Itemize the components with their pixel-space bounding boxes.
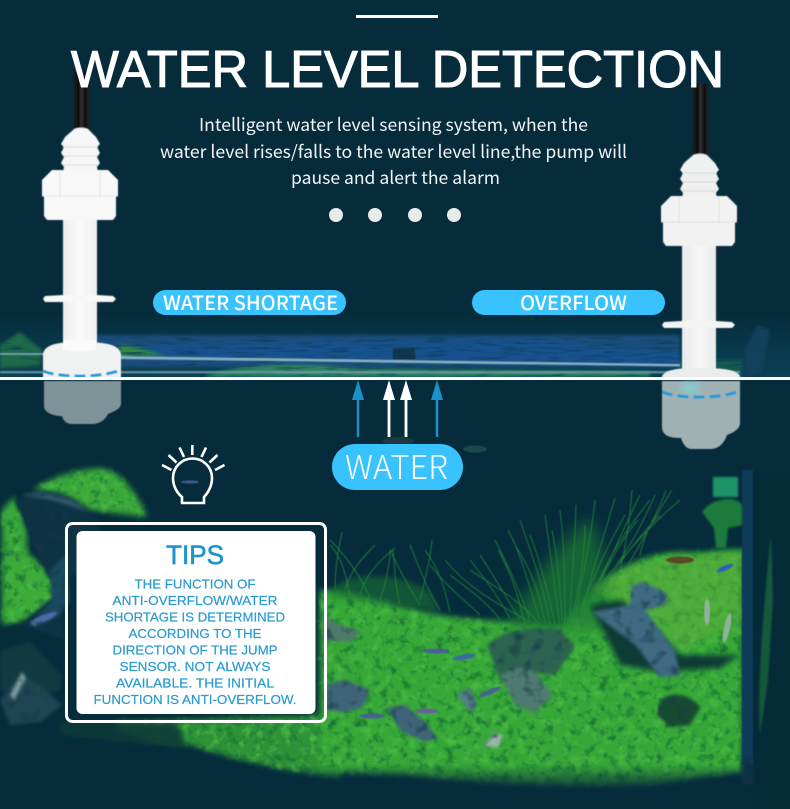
right sensor: overflow: [661, 84, 740, 449]
tips body: ANTI-OVERFLOW/WATER: [112, 593, 278, 608]
inner card: [76, 531, 316, 714]
tips panel: [66, 524, 326, 722]
mound highlight: [590, 552, 742, 650]
rocks: [323, 582, 700, 748]
thread shading: [682, 173, 717, 191]
description: pause and alert the alarm: [291, 165, 500, 190]
tips body: [94, 576, 296, 707]
arrows: rising water: [352, 380, 443, 437]
tips body: FUNCTION IS ANTI-OVERFLOW.: [94, 692, 296, 707]
submerged teal glow: [680, 382, 700, 394]
background plant with green tag: [702, 477, 742, 548]
tips body: THE FUNCTION OF: [134, 576, 256, 592]
outer frame: [66, 524, 326, 722]
aquarium water surface band: [0, 315, 790, 378]
water level line: [0, 377, 790, 380]
tips body: DIRECTION OF THE JUMP: [112, 642, 278, 658]
water mark dashes: [662, 391, 740, 397]
threaded neck: [680, 154, 719, 198]
description: water level rises/falls to the water level line,the pump will: [160, 139, 627, 164]
hex nut: [661, 196, 737, 246]
top accent line: [356, 15, 438, 18]
nut facets: [42, 171, 118, 197]
central grass: [330, 490, 680, 625]
float: [43, 342, 121, 378]
stem: [682, 246, 716, 374]
tank post and right side: [742, 470, 790, 809]
stem base over float: [63, 340, 96, 352]
dark shadow under mound: [590, 600, 740, 672]
pagination dots: [329, 208, 461, 222]
dark zone under tips panel: [60, 722, 190, 748]
label: water shortage: WATER SHORTAGE: [163, 287, 338, 316]
stem: [63, 220, 97, 348]
description: Intelligent water level sensing system, when the: [199, 112, 588, 137]
hex nut: [42, 170, 118, 220]
tips body: SHORTAGE IS DETERMINED: [105, 610, 285, 624]
bottom-left moss diagonal: [113, 715, 340, 778]
tips body: SENSOR. NOT ALWAYS: [120, 659, 271, 674]
description: [160, 112, 627, 190]
water mark dashes: [43, 370, 121, 376]
label: overflow: [472, 287, 665, 316]
tips heading: TIPS: [166, 540, 224, 570]
cable: [74, 72, 89, 130]
tips body: ACCORDING TO THE: [128, 626, 262, 641]
aquarium plants and rocks: [0, 437, 790, 809]
bottom shade: [300, 764, 750, 792]
flange: [43, 295, 116, 302]
nut facets: [661, 197, 737, 223]
tips body: AVAILABLE. THE INITIAL: [116, 676, 274, 690]
submerged float: [662, 381, 740, 449]
back-left moss mounds: [2, 468, 147, 624]
submerged reflection: [44, 381, 121, 424]
title: WATER LEVEL DETECTION: [71, 41, 724, 99]
cable: [693, 84, 708, 155]
main green carpet: [320, 550, 742, 786]
thread shading: [63, 147, 98, 165]
left sensor: water shortage: [42, 72, 121, 424]
float top: [662, 368, 740, 378]
label: overflow: OVERFLOW: [520, 287, 627, 316]
icon: light bulb: [162, 445, 224, 503]
threaded neck: [61, 128, 100, 172]
label: water: WATER: [345, 441, 448, 489]
central grass shadow masses: [505, 520, 610, 630]
flange: [662, 321, 735, 328]
left dark rock pile: [0, 492, 100, 725]
fish: [33, 437, 734, 718]
